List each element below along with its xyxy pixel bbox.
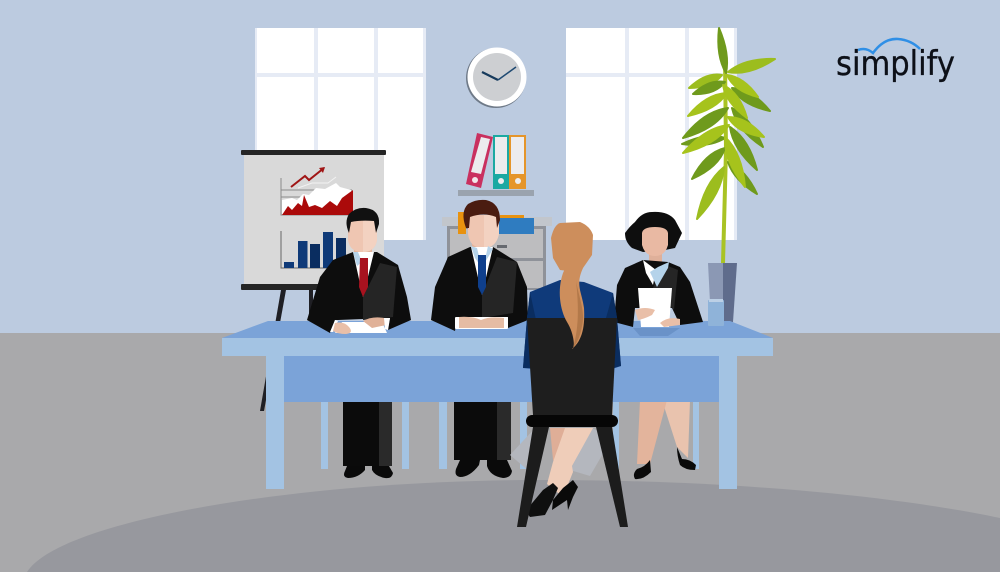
legs [547,428,593,497]
person: left man [307,208,411,334]
jacket [523,280,621,369]
hair [463,200,500,228]
wall [0,0,1000,334]
floor [0,333,1000,572]
neck and face [468,215,499,250]
chair back [527,318,617,415]
shelf with binders [458,133,534,196]
lower body: seated woman [634,400,696,479]
plant pot [708,263,737,322]
face [642,227,668,262]
neck and face [348,220,377,256]
person: right woman [614,212,703,327]
icon: wall clock [466,48,526,108]
area chart [281,167,353,215]
hair [346,208,379,233]
hands and cuffs [455,317,508,329]
glass of water [708,299,724,326]
person: centre man [431,200,528,331]
potted plant [682,28,775,322]
lower body: centre man [454,400,512,478]
left window [255,28,426,240]
bar chart [281,231,346,268]
plant leaves [682,28,775,219]
person: interviewee seen from behind [510,222,628,527]
lower body: left man [343,400,393,478]
paper and hands [638,288,672,327]
chair legs [517,427,549,527]
right window [566,28,737,240]
plant stem [723,60,726,263]
filing cabinet [442,212,552,290]
jacket [431,247,528,331]
jacket [307,252,411,333]
ponytail [560,260,584,349]
chair seat [526,415,618,427]
flipchart [241,150,386,411]
table shadow under paper [633,328,680,336]
paper and hands [335,322,387,333]
logo: simplify: simplify [836,44,955,84]
table [222,321,773,489]
chair shadow [510,428,612,476]
head hair [551,222,593,272]
jacket [614,260,703,327]
hair [625,212,682,252]
shoes [552,480,578,510]
back table legs [321,400,699,469]
